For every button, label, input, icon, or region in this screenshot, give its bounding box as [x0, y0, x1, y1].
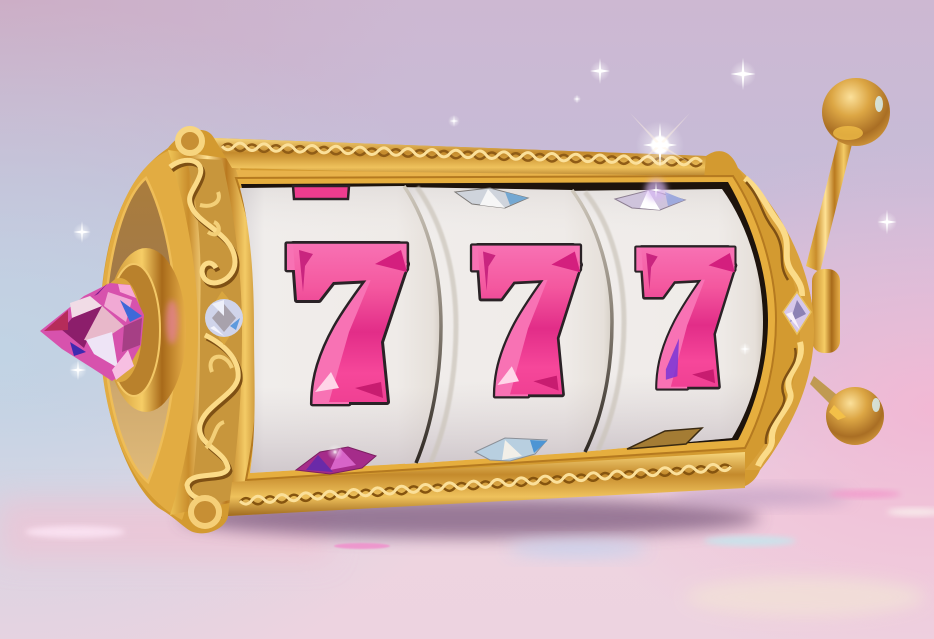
upper scroll	[170, 160, 237, 286]
reel 1	[240, 186, 441, 474]
flare on reel 3 gem	[645, 179, 667, 201]
gem: side diamond left	[205, 291, 243, 345]
gem: large pink diamond	[40, 283, 144, 381]
machine body	[98, 129, 814, 533]
number 7 on reel 1: 7	[276, 193, 418, 454]
gem on reel 2 top	[455, 188, 528, 208]
gem on reel 1	[296, 447, 376, 474]
number 7 on reel 2: 7	[462, 198, 590, 443]
gem: side diamond right	[783, 292, 811, 334]
reel 2	[395, 187, 612, 464]
reel 2 edge	[572, 190, 612, 452]
number 7 on reel 3: 7	[627, 203, 744, 432]
lower ball	[826, 387, 884, 445]
number 7 on reel 1: 7	[276, 193, 418, 454]
number 7 on reel 2: 7	[462, 198, 590, 443]
rim of reel 3	[585, 192, 624, 450]
window recess	[241, 182, 768, 472]
top ornamental rail	[214, 138, 735, 186]
partial pink symbol on reel 1	[293, 186, 349, 199]
reel 3	[560, 189, 763, 453]
gold symbol on reel 3	[627, 428, 702, 449]
window frame	[236, 176, 776, 480]
upper rod	[806, 140, 852, 272]
lever	[806, 78, 890, 445]
lower rod	[810, 376, 848, 416]
pivot	[812, 269, 840, 353]
sparkles	[69, 58, 897, 460]
number 7 on reel 3: 7	[627, 203, 744, 432]
gem on reel 3	[615, 190, 685, 210]
upper ball	[822, 78, 890, 146]
lower scroll	[187, 335, 240, 518]
floor reflections and shadow	[0, 489, 934, 617]
cap face	[105, 178, 176, 482]
cap rim	[100, 150, 199, 520]
reel 1 edge	[404, 186, 441, 463]
gem on reel 2 bottom	[475, 438, 547, 461]
ornate left band	[168, 129, 262, 526]
rim of reel 2	[417, 187, 456, 462]
bottom ornamental rail	[228, 452, 745, 516]
right ornate band	[738, 168, 814, 470]
large flare on top rail	[630, 113, 694, 169]
gold silhouette	[100, 130, 814, 533]
hub rings	[98, 248, 186, 412]
flare on reel 1 gem	[327, 444, 343, 460]
